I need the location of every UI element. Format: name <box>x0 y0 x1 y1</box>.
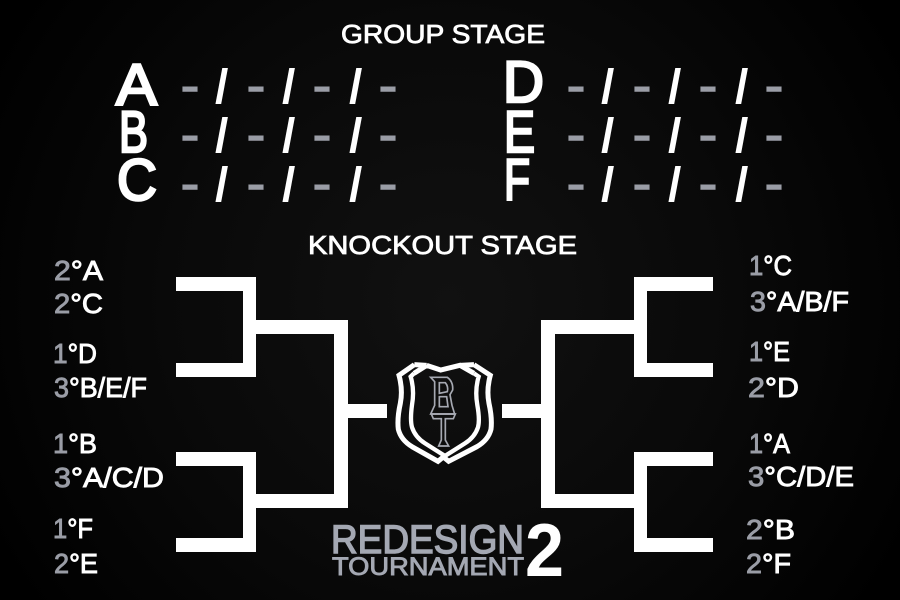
group C row: / <box>349 159 362 212</box>
group E row: - <box>764 100 784 167</box>
group B row <box>119 100 398 167</box>
panel: group stage results <box>116 50 784 216</box>
group C row <box>117 148 398 216</box>
group A row <box>116 51 398 118</box>
team 1st F: 1°F <box>53 513 93 544</box>
group E row: / <box>668 110 681 163</box>
group D row: - <box>698 51 718 118</box>
group C row: - <box>378 149 398 216</box>
team 1st E: 1°E <box>749 336 790 367</box>
group E row: - <box>632 100 652 167</box>
logo: Redesign Tournament 2 <box>331 508 564 592</box>
panel: left bracket teams <box>53 255 164 579</box>
group A row: / <box>215 61 228 114</box>
team 3rd B/E/F: 3°B/E/F <box>54 372 147 403</box>
team 3rd A/B/F: 3°A/B/F <box>750 286 849 317</box>
group A row: - <box>246 51 266 118</box>
group B row: - <box>312 100 332 167</box>
team 1st C: 1°C <box>749 250 792 281</box>
group D row: / <box>668 61 681 114</box>
group F row: - <box>764 149 784 216</box>
logo numeral 2: 2 <box>525 508 564 592</box>
group E row: / <box>601 110 614 163</box>
group F row: / <box>601 159 614 212</box>
group E row: - <box>698 100 718 167</box>
team 2nd C: 2°C <box>54 288 103 319</box>
group B row: / <box>349 110 362 163</box>
team 2nd D: 2°D <box>748 372 799 403</box>
group B row: B <box>119 100 148 165</box>
group D row: D <box>503 50 544 115</box>
shield outer outline <box>398 365 491 461</box>
group C row: - <box>246 149 266 216</box>
shield inner outline <box>411 373 479 456</box>
group D row: / <box>735 61 748 114</box>
group B row: - <box>180 100 200 167</box>
chart: left knockout bracket <box>176 277 387 552</box>
group D row <box>503 50 784 118</box>
panel: right bracket teams <box>746 250 854 579</box>
group C row: - <box>180 149 200 216</box>
group F row <box>504 148 784 216</box>
group D row: / <box>601 61 614 114</box>
group A row: - <box>180 51 200 118</box>
team 3rd C/D/E: 3°C/D/E <box>748 461 854 492</box>
group D row: - <box>632 51 652 118</box>
group B row: - <box>378 100 398 167</box>
group B row: / <box>282 110 295 163</box>
heading: knockout stage: KNOCKOUT STAGE <box>308 230 577 260</box>
icon: shield logo <box>398 365 491 461</box>
chart: right knockout bracket <box>502 277 713 552</box>
group F row: - <box>632 149 652 216</box>
heading: group stage: GROUP STAGE <box>341 19 545 49</box>
group C row: / <box>215 159 228 212</box>
logo word: Tournament: TOURNAMENT <box>332 553 524 581</box>
group B row: - <box>246 100 266 167</box>
team 2nd B: 2°B <box>746 514 795 545</box>
team 2nd F: 2°F <box>746 548 791 579</box>
group F row: - <box>698 149 718 216</box>
group A row: A <box>116 53 157 118</box>
logo word: Redesign: REDESIGN <box>331 518 524 562</box>
team 1st A: 1°A <box>749 428 790 459</box>
team 1st B: 1°B <box>53 428 97 459</box>
group E row: E <box>504 100 535 165</box>
group A row: - <box>378 51 398 118</box>
monogram R and T <box>431 377 455 446</box>
group F row: - <box>566 149 586 216</box>
team 2nd A: 2°A <box>54 255 103 286</box>
team 1st D: 1°D <box>53 338 97 369</box>
group F row: / <box>735 159 748 212</box>
group C row: C <box>117 148 157 213</box>
group A row: / <box>349 61 362 114</box>
group C row: / <box>282 159 295 212</box>
group E row <box>504 100 784 167</box>
group A row: - <box>312 51 332 118</box>
group B row: / <box>215 110 228 163</box>
group E row: - <box>566 100 586 167</box>
group E row: / <box>735 110 748 163</box>
group F row: F <box>504 148 530 213</box>
group C row: - <box>312 149 332 216</box>
team 2nd E: 2°E <box>54 548 98 579</box>
group D row: - <box>764 51 784 118</box>
group D row: - <box>566 51 586 118</box>
group A row: / <box>282 61 295 114</box>
team 3rd A/C/D: 3°A/C/D <box>54 462 164 493</box>
group F row: / <box>668 159 681 212</box>
